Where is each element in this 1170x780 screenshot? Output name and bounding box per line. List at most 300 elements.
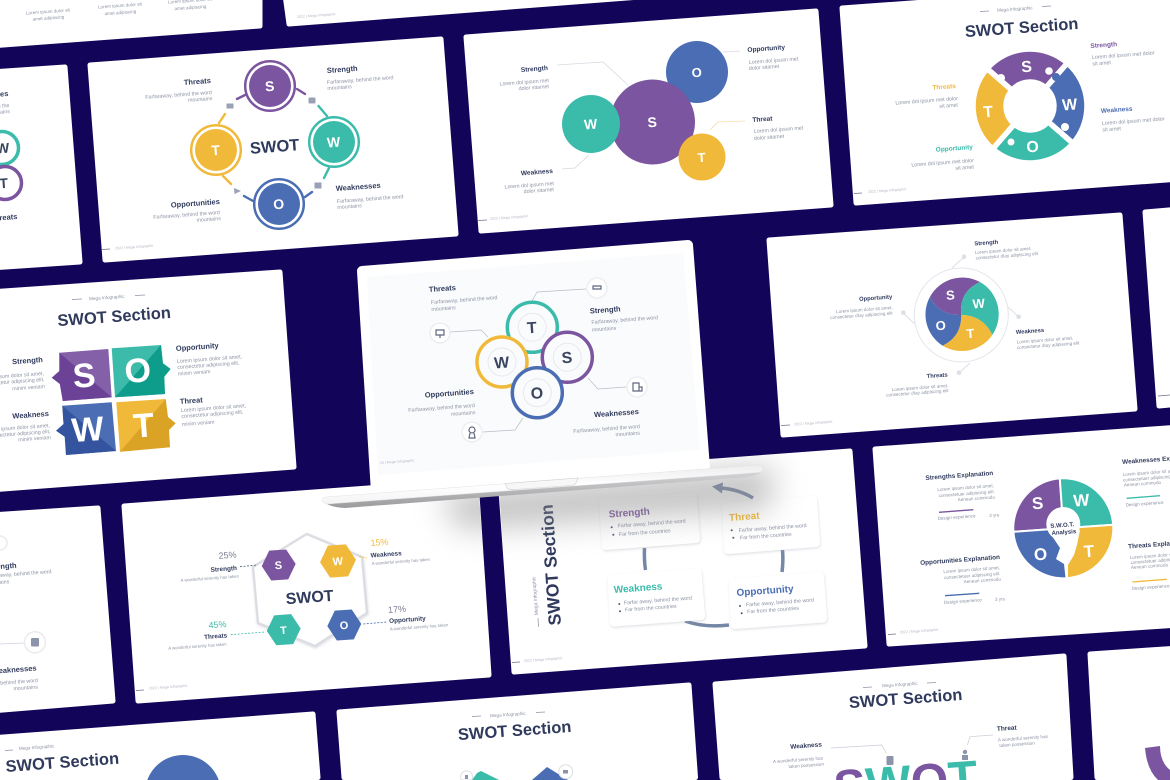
label: opportunities: mountains: [451, 410, 476, 418]
connectors: [903, 257, 1019, 373]
ring T: T: [526, 320, 538, 337]
ring S: S: [561, 350, 573, 367]
block: strengths explanation: Strengths Explanation: [925, 470, 994, 482]
label: opportunities: Farfaraway, behind the word: [153, 210, 220, 221]
label: weakness: minim veniam: [18, 435, 52, 443]
block: opportunities explanation: [920, 554, 1006, 605]
puzzle letters: T: [983, 104, 994, 121]
card: weakness: Weakness: [613, 581, 663, 596]
label: threats: Threats: [428, 283, 456, 294]
laptop notch: [505, 478, 578, 490]
label: strength: Lorem dol ipsum met: [499, 78, 550, 88]
central hexagon: [253, 534, 367, 646]
label: threat: minim veniam: [182, 420, 215, 428]
label: opportunities: Opportunities: [424, 387, 474, 400]
bubble W: [562, 95, 620, 153]
card: opportunity: Far from the countries: [747, 606, 799, 615]
card: strength: [603, 497, 696, 546]
tile O: O: [123, 351, 152, 391]
label: weakness: consectetur dIay adipiscing elit: [1017, 340, 1080, 350]
ring W: [477, 337, 527, 387]
label: weakness: [773, 741, 825, 769]
label: weakness: [504, 168, 555, 195]
card: threat: [726, 500, 816, 550]
rings: [0, 132, 22, 200]
panel: right cropped slide row two: [1145, 209, 1170, 406]
label: threat: dolor sitamet: [754, 134, 785, 142]
title: SWOT Section: [964, 15, 1079, 41]
block: opportunities explanation: Aenean commodo: [964, 576, 1002, 584]
label: threat: Lorem ipsum dolor sit amet,: [181, 403, 246, 414]
label: strength: [326, 64, 394, 92]
circle O: O: [273, 196, 285, 212]
label: weakness: [0, 409, 52, 443]
label: threats: Threats: [932, 83, 957, 92]
ring O: [512, 368, 562, 418]
swirl pie: O: [935, 318, 946, 333]
bubble W: W: [583, 115, 599, 132]
label: strength: [0, 355, 46, 392]
laptop shadow: [440, 468, 775, 528]
label: strength: Strength: [12, 355, 44, 366]
label: weaknesses: mountains: [337, 203, 362, 211]
connector lines: [450, 289, 626, 432]
label: threat: Threat: [179, 395, 204, 406]
block: weaknesses explanation: Aenean commodo: [1124, 480, 1162, 487]
eyebrow: [863, 681, 936, 688]
head silhouette: [1046, 507, 1080, 578]
card: opportunity: [732, 576, 823, 625]
bubble S: [610, 80, 695, 164]
label: strength: [974, 240, 1039, 260]
footer: 2022 | Mega Infographic: [149, 684, 188, 690]
laptop base lip: [322, 465, 763, 504]
panel: hexagon SWOT percentages slide: [124, 480, 489, 701]
label: weaknesses: mountains: [615, 430, 640, 438]
swirl pie: W: [972, 296, 986, 311]
stat: strength: 25%: [218, 550, 237, 561]
stat: weakness: 15%: [370, 537, 389, 548]
tile O: [112, 345, 171, 397]
hexagon S: S: [274, 560, 283, 572]
swirl pie: [925, 278, 999, 351]
hexagon W: W: [332, 556, 344, 568]
screen footer: 15 | Mega Infographic: [380, 458, 415, 465]
label: strength: [1090, 41, 1155, 67]
block: strengths explanation: Aenean commodo: [958, 494, 996, 502]
label: weakness: taken possession: [788, 761, 825, 769]
label: weaknesses: Farfaraway, behind the word: [573, 424, 640, 435]
label: strength: mountains: [592, 326, 617, 333]
label: opportunity: Lorem ipsum dolor sit amet,: [836, 305, 893, 314]
tile W: [56, 402, 116, 455]
label: opportunity: Opportunity: [747, 44, 786, 54]
label: strength: [499, 65, 550, 92]
card: threat: Farfar away, behind the word: [738, 523, 807, 534]
shapes: [472, 767, 568, 780]
ring letters: [0, 139, 11, 191]
label: weakness: Lorem ipsum dolor sit amet,: [1016, 335, 1073, 344]
pie letters: O: [1033, 545, 1048, 564]
center label: Analysis: [1051, 529, 1077, 537]
panel: SWOT puzzle slide: [842, 0, 1170, 203]
purple arc: [1145, 746, 1170, 780]
ring T: [507, 302, 557, 352]
label: opportunity: Lorem dol ipsum met dolor: [911, 158, 974, 169]
label: threat: [752, 115, 804, 142]
card: strength: Strength: [608, 507, 650, 520]
eyebrow: [72, 294, 145, 301]
label: threat: consectetur adipiscing elit,: [181, 409, 244, 420]
card: weakness: [612, 572, 701, 622]
bubble O: [666, 41, 728, 103]
swirl pie: S: [945, 287, 956, 303]
small icons: [226, 98, 322, 194]
tile S: S: [71, 356, 97, 396]
label: weakness: sit amet: [1102, 126, 1122, 133]
panel: bottom-left SWOT section slide: [0, 714, 318, 780]
panel: SWOT bubble slide: [466, 11, 831, 231]
label: opportunities: [153, 197, 221, 224]
block: opportunities explanation: Lorem ipsum dolor sit amet,: [943, 565, 1000, 574]
label: opportunity: [747, 44, 799, 72]
block: threats explanation: Aenean commodo: [1131, 562, 1169, 570]
card: threat: Far from the countries: [740, 532, 792, 541]
title: SWOT Section: [848, 686, 963, 712]
label: opportunity: Lorem dol ipsum met: [749, 56, 799, 66]
stat: weakness: Weakness: [370, 550, 402, 559]
panel: top-left cropped slide: [0, 0, 260, 46]
label: weaknesses: [0, 664, 38, 692]
pie letters: S: [1031, 494, 1044, 513]
bubble O: O: [691, 65, 702, 80]
label: strength: dolor sitamet: [518, 84, 550, 92]
label: weakness: Lorem dol ipsum met dolor: [1102, 116, 1165, 127]
block: opportunities explanation: 3 yrs.: [995, 596, 1006, 602]
panel: SWOT ring cycle slide: [90, 39, 456, 260]
label: threats: Farfaraway, behind the word: [145, 90, 212, 101]
stat: strength: [180, 550, 240, 583]
pie letters: [1031, 490, 1095, 564]
ring W: W: [494, 354, 511, 373]
eyebrow: Mega Infographic: [882, 681, 918, 688]
block: weaknesses explanation: Design experience: [1125, 500, 1164, 507]
label: threats: sit amet: [939, 102, 959, 110]
label: threat: taken possession: [999, 740, 1035, 748]
stat: strength: A wonderful serenity has taken: [180, 573, 240, 583]
label: threats: Farfaraway, behind the word: [431, 295, 498, 306]
label: threat: [997, 724, 1049, 748]
label: weaknesses: Weaknesses: [335, 181, 381, 193]
label: opportunity: Opportunity: [936, 144, 974, 154]
block: strengths explanation: 3 yrs.: [989, 512, 1001, 518]
card: threat: Threat: [729, 511, 761, 524]
panel: far right cropped slide: [1090, 648, 1170, 780]
icons: [886, 750, 968, 765]
connector: [0, 643, 24, 644]
circle O: [254, 179, 304, 229]
label: threats: [895, 83, 959, 110]
laptop base underside: [326, 471, 762, 508]
panel: swirl pie slide: [769, 215, 1135, 435]
stat: strength: Strength: [210, 565, 237, 574]
block: opportunities explanation: consectetuer adipiscing elit.: [944, 571, 1001, 580]
center label: S.W.O.T.: [1050, 522, 1075, 530]
block: threats explanation: [1128, 539, 1170, 591]
label: weakness: [1016, 328, 1080, 350]
connector dots: [901, 254, 1021, 375]
panel: left cropped overlapping rings slide: [0, 67, 80, 268]
puzzle letters: [983, 59, 1079, 156]
cropped captions: Lorem ipsum dolor sit: [26, 7, 71, 16]
connectors: [831, 735, 993, 753]
footer: 2022 | Mega Infographic: [868, 187, 907, 194]
block: opportunities explanation: Design experience: [944, 597, 982, 605]
label: strength: Strength: [589, 304, 621, 315]
block: strengths explanation: Design experience: [937, 513, 976, 521]
label: strength: sit amet: [1092, 60, 1112, 67]
card: weakness: Far from the countries: [625, 604, 677, 613]
label: threats: Threats: [183, 76, 211, 87]
circle S: [245, 61, 295, 111]
pie letters: W: [1073, 490, 1091, 511]
label: strength: Strength: [974, 240, 999, 247]
stat: threats: [168, 619, 228, 651]
label: strength: Farfaraway, behind the word: [327, 75, 394, 86]
label: opportunity: dolor sitamet: [749, 64, 780, 72]
panel: bottom-middle SWOT section slide: [339, 685, 696, 780]
tile S: [52, 349, 112, 401]
label: threats: mountains: [431, 305, 456, 313]
label: opportunity: Opportunity: [859, 294, 893, 303]
footer: 2022 | Mega Infographic: [297, 12, 336, 19]
label: strength: [0, 561, 52, 587]
card: opportunity: Farfar away, behind the word: [746, 598, 814, 608]
label: opportunities: Opportunities: [170, 197, 220, 210]
label: opportunity: minim veniam: [178, 369, 211, 377]
eyebrow: [472, 711, 545, 718]
center title: SWOT: [249, 136, 300, 158]
hexagon T: T: [280, 625, 288, 637]
blue circle: [147, 755, 219, 780]
footer: 2022 | Mega Infographic: [115, 244, 154, 250]
label: strength: Farfaraway, behind the word: [591, 315, 658, 326]
label: opportunity: consectetur dIay adipiscing elit: [830, 310, 893, 320]
circle W: W: [326, 133, 342, 150]
label: threat: A wonderful serenity has: [998, 734, 1049, 742]
hexagon T: [266, 614, 302, 646]
label: strength: Strength: [1090, 41, 1117, 50]
label: strength: [589, 304, 658, 333]
label: threats: Threats: [927, 373, 948, 380]
label: threats: Lorem dol ipsum met dolor: [895, 96, 958, 107]
label: weakness: Lorem dol ipsum met: [504, 181, 555, 191]
eyebrow: Mega Infographic: [89, 294, 125, 301]
block: opportunities explanation: Opportunities Explanation: [920, 554, 1000, 567]
card: strength: Far from the countries: [619, 528, 671, 538]
label: strength: Lorem dol ipsum met dolor: [1092, 50, 1155, 61]
label: opportunities: mountains: [196, 216, 221, 224]
footer: 2022 | Mega Infographic: [900, 628, 939, 634]
card: opportunity: Opportunity: [736, 584, 794, 599]
label: weaknesses: Farfaraway, behind the word: [337, 194, 404, 205]
footer: 2022 | Mega Infographic: [794, 420, 833, 426]
panel: SWOT section tiles slide: [0, 272, 294, 490]
hexagon O: [326, 609, 362, 641]
icon glyphs: [465, 770, 568, 779]
cropped captions: [26, 0, 213, 22]
block: strengths explanation: consectetuer adipiscing elit.: [938, 489, 995, 498]
connector ticks: [219, 89, 329, 201]
icon glyphs: [436, 286, 642, 438]
circle S: S: [264, 78, 275, 94]
stat: threats: 45%: [208, 619, 227, 630]
block: strengths explanation: Lorem ipsum dolor sit amet,: [937, 483, 994, 492]
vertical title: SWOT Section: [537, 504, 565, 626]
panel: top-middle cropped slide: [283, 0, 650, 24]
stat: opportunity: Opportunity: [389, 615, 426, 625]
label: strength: consectetur dIay adipiscing elit: [975, 251, 1039, 260]
block: weaknesses explanation: [1122, 453, 1170, 507]
label: opportunity: [175, 341, 242, 377]
label: threats: Lorem ipsum dolor sit amet,: [891, 383, 948, 392]
stat: opportunity: A wonderful serenity has taken: [390, 622, 449, 631]
block: threats explanation: Design experience: [1131, 583, 1170, 591]
block: strengths explanation: [925, 470, 1001, 521]
stat: weakness: A wonderful serenity has taken: [371, 557, 431, 566]
laptop lid bezel: [362, 245, 705, 492]
label: threats: [886, 373, 949, 398]
puzzle ring: [973, 49, 1087, 163]
panel: S.W.O.T. analysis slide: [875, 427, 1170, 644]
label: threats: [145, 76, 213, 104]
label: strength: mountains: [327, 84, 352, 92]
card: strength: Farfar away, behind the word: [617, 519, 686, 529]
label: opportunity: Lorem ipsum dolor sit amet,: [177, 354, 242, 365]
panel: SWOT cycle cards slide: [500, 451, 865, 672]
hexagon W: [319, 544, 357, 578]
label: threat: Threat: [997, 724, 1018, 733]
center title: SWOT: [285, 588, 334, 608]
puzzle letters: O: [1026, 139, 1040, 156]
label: weakness: A wonderful serenity has: [773, 755, 824, 764]
doc icon: [31, 638, 39, 646]
ring O: O: [530, 385, 544, 403]
label: opportunity: sit amet: [955, 164, 975, 172]
pie chart: [1013, 478, 1113, 578]
cropped captions: Lorem ipsum dolor sit: [98, 1, 143, 10]
footer: 2022 | Mega Infographic: [524, 656, 563, 663]
label: threats: mountains: [188, 96, 213, 104]
panel: bottom-right SWOT section slide: [715, 656, 1071, 780]
label: threats: [428, 283, 498, 313]
laptop screen: [367, 253, 700, 475]
stat: threats: Threats: [204, 632, 228, 641]
label: weaknesses: [335, 181, 404, 211]
tile T: T: [132, 406, 156, 446]
icon badges: [430, 278, 647, 442]
label: weakness: dolor sitamet: [523, 187, 555, 195]
cropped labels: [0, 89, 18, 223]
label: strength: Strength: [326, 64, 358, 75]
stat: opportunity: [388, 604, 449, 631]
stat: opportunity: 17%: [388, 604, 406, 615]
circle T: [191, 125, 241, 175]
label: weaknesses: [573, 407, 640, 438]
label: threat: Threat: [752, 115, 774, 124]
label: weakness: Weakness: [12, 409, 49, 421]
panel: bottom-left cropped slide: [0, 508, 113, 711]
eyebrow: Mega Infographic: [19, 743, 55, 751]
label: weakness: Weakness: [521, 168, 553, 177]
cycle arcs: [644, 488, 783, 626]
label: strength: minim veniam: [12, 384, 46, 392]
eyebrow: Mega Infographic: [997, 5, 1033, 13]
cropped captions: amet adipiscing: [174, 4, 207, 11]
eyebrow: Mega Infographic: [490, 711, 526, 718]
outer ring: [914, 268, 1008, 362]
circle T: T: [211, 142, 221, 158]
ring S: [542, 332, 592, 382]
bubble T: [678, 134, 726, 180]
center label: [1050, 522, 1077, 537]
stat: threats: A wonderful serenity has taken: [168, 641, 227, 651]
puzzle letters: W: [1062, 96, 1079, 115]
label: weakness: [1101, 106, 1165, 133]
bubble T: T: [697, 150, 706, 165]
hexagon S: [261, 549, 297, 581]
label: weaknesses: Weaknesses: [594, 407, 639, 419]
swirl pie: T: [966, 326, 975, 341]
title: SWOT Section: [5, 750, 120, 776]
label: opportunity: consectetur adipiscing elit,: [177, 360, 240, 371]
bubble S: S: [647, 114, 657, 130]
label: opportunity: Opportunity: [175, 341, 220, 353]
laptop: [322, 245, 763, 508]
dotted connectors: [231, 557, 387, 635]
cropped captions: amet adipiscing: [32, 14, 65, 22]
label: weaknesses: mountains: [13, 684, 38, 692]
label: weakness: Weakness: [1016, 328, 1044, 336]
icon badges: [461, 765, 573, 780]
cropped captions: amet adipiscing: [104, 9, 137, 16]
stat: weakness: [370, 537, 431, 566]
footer: 2022 | Mega Infographic: [490, 214, 529, 221]
puzzle knobs: [992, 67, 1069, 146]
pie letters: T: [1083, 542, 1095, 561]
hexagon O: O: [339, 620, 349, 632]
label: opportunities: [408, 387, 476, 418]
label: strength: Lorem ipsum dolor sit amet,: [975, 246, 1032, 255]
eyebrow: [980, 5, 1051, 13]
label: threats: consectetur dIay adipiscing elit: [886, 388, 949, 398]
label: weakness: Weakness: [790, 741, 823, 751]
title: SWOT Section: [57, 304, 171, 330]
label: opportunity: [830, 294, 893, 320]
label: threat: [179, 395, 246, 428]
tile W: W: [70, 410, 106, 450]
label: threat: Lorem dol ipsum met: [754, 125, 804, 135]
title: SWOT Section: [457, 718, 572, 744]
connector lines: [557, 51, 745, 169]
footer rule: [1158, 395, 1170, 396]
label: opportunity: [911, 144, 975, 172]
card: weakness: Farfar away, behind the word: [624, 596, 692, 606]
label: weakness: Weakness: [1101, 106, 1133, 115]
vertical eyebrow: Mega Infographic: [531, 576, 540, 615]
label: strength: Strength: [521, 65, 548, 74]
tile T: [116, 399, 176, 452]
